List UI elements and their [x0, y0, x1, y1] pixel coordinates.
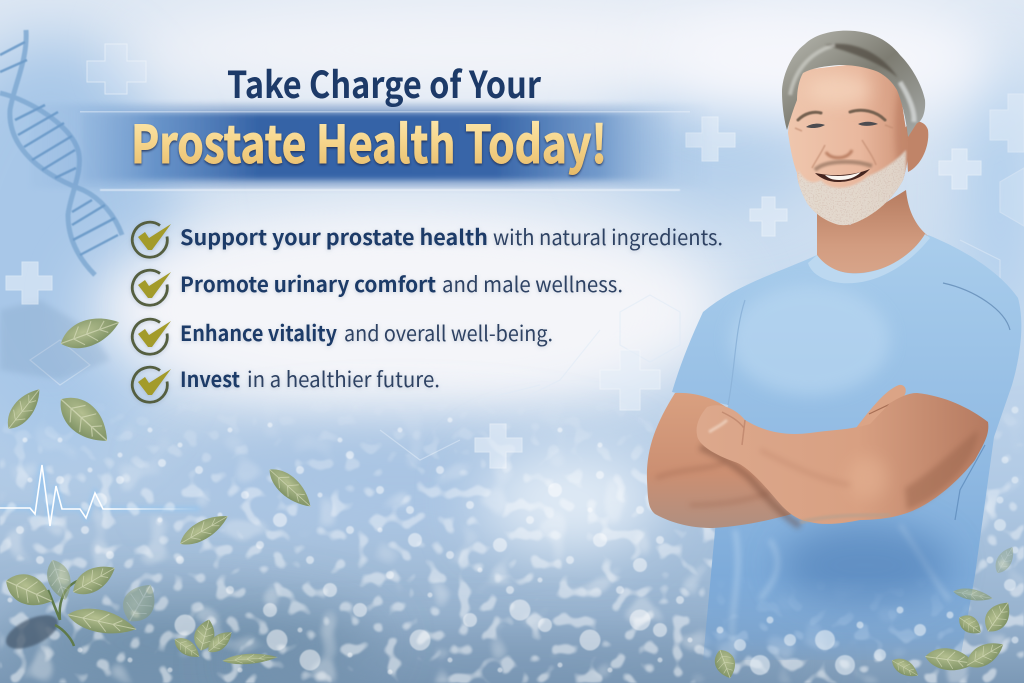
item text: in a healthier future.: [247, 364, 440, 394]
face: [788, 62, 908, 225]
decorative hexagon network: [30, 168, 1024, 460]
leaf: [991, 543, 1018, 576]
leaf: [171, 633, 204, 662]
eyes: [806, 122, 878, 128]
eyebrows: [798, 110, 885, 120]
leaf: [0, 383, 47, 435]
leaf: [51, 387, 118, 452]
item 4: [132, 364, 440, 402]
head: [782, 31, 928, 230]
plant: bottom centre: [171, 617, 278, 666]
item text: Enhance vitality: [180, 318, 337, 348]
ear: [905, 121, 928, 172]
item 1: [132, 222, 723, 257]
leaf: [222, 652, 278, 666]
leaf: [889, 654, 922, 681]
hand: fingers: [856, 385, 918, 436]
leaf: [191, 617, 218, 653]
leaf: [952, 586, 994, 604]
moustache: [815, 162, 872, 170]
leaf: [1, 567, 58, 614]
item 2: [132, 269, 623, 305]
bokeh lights: [0, 417, 1024, 683]
man: [647, 31, 1021, 660]
mouth: [815, 169, 870, 182]
neck: [817, 190, 928, 282]
t-shirt: [672, 234, 1021, 660]
leaf: [67, 558, 120, 601]
wrinkles: [795, 125, 893, 168]
item text: and male wellness.: [442, 269, 623, 299]
arm shadow: [700, 447, 800, 526]
leaf: [42, 556, 77, 603]
leaf: [962, 636, 1008, 674]
plant: bottom right: [711, 543, 1018, 681]
arm: forearm with fist: [697, 393, 988, 524]
item 3: [132, 318, 553, 354]
leaf: [66, 603, 139, 640]
icon: check mark: [132, 222, 171, 257]
bokeh over shirt hem: [720, 410, 1015, 665]
leaf: [955, 611, 985, 639]
item text: and overall well-being.: [344, 318, 553, 348]
leaf: [979, 596, 1017, 637]
hair: [782, 31, 925, 137]
benefit list: [132, 222, 723, 402]
leaf: [175, 508, 232, 551]
leaf: [204, 627, 236, 657]
icon: check mark: [132, 270, 171, 305]
item text: Promote urinary comfort: [180, 269, 436, 299]
leaf: [56, 310, 123, 355]
icon: check mark: [132, 367, 171, 402]
leaf: [711, 646, 740, 681]
leaf: [263, 462, 317, 513]
nose: [826, 150, 852, 158]
icon: check mark: [132, 319, 171, 354]
leaf: [116, 577, 163, 629]
plant: bottom left: [1, 556, 163, 656]
item text: Invest: [180, 364, 240, 394]
title line 1: Take Charge of Your: [227, 55, 542, 109]
icon: DNA helix: [0, 30, 122, 275]
arm: lower: [647, 393, 800, 528]
title line 2: Prostate Health Today!: [131, 103, 607, 178]
item text: Support your prostate health: [180, 222, 488, 252]
icon: medical crosses: [6, 44, 1024, 468]
title banner: [30, 104, 710, 191]
item text: with natural ingredients.: [493, 222, 723, 252]
face shading and beard: [795, 74, 915, 230]
circuit texture on the left: [0, 300, 110, 380]
floating leaves: [0, 310, 317, 551]
leaf: [924, 645, 976, 674]
icon: heartbeat line: [0, 465, 200, 526]
